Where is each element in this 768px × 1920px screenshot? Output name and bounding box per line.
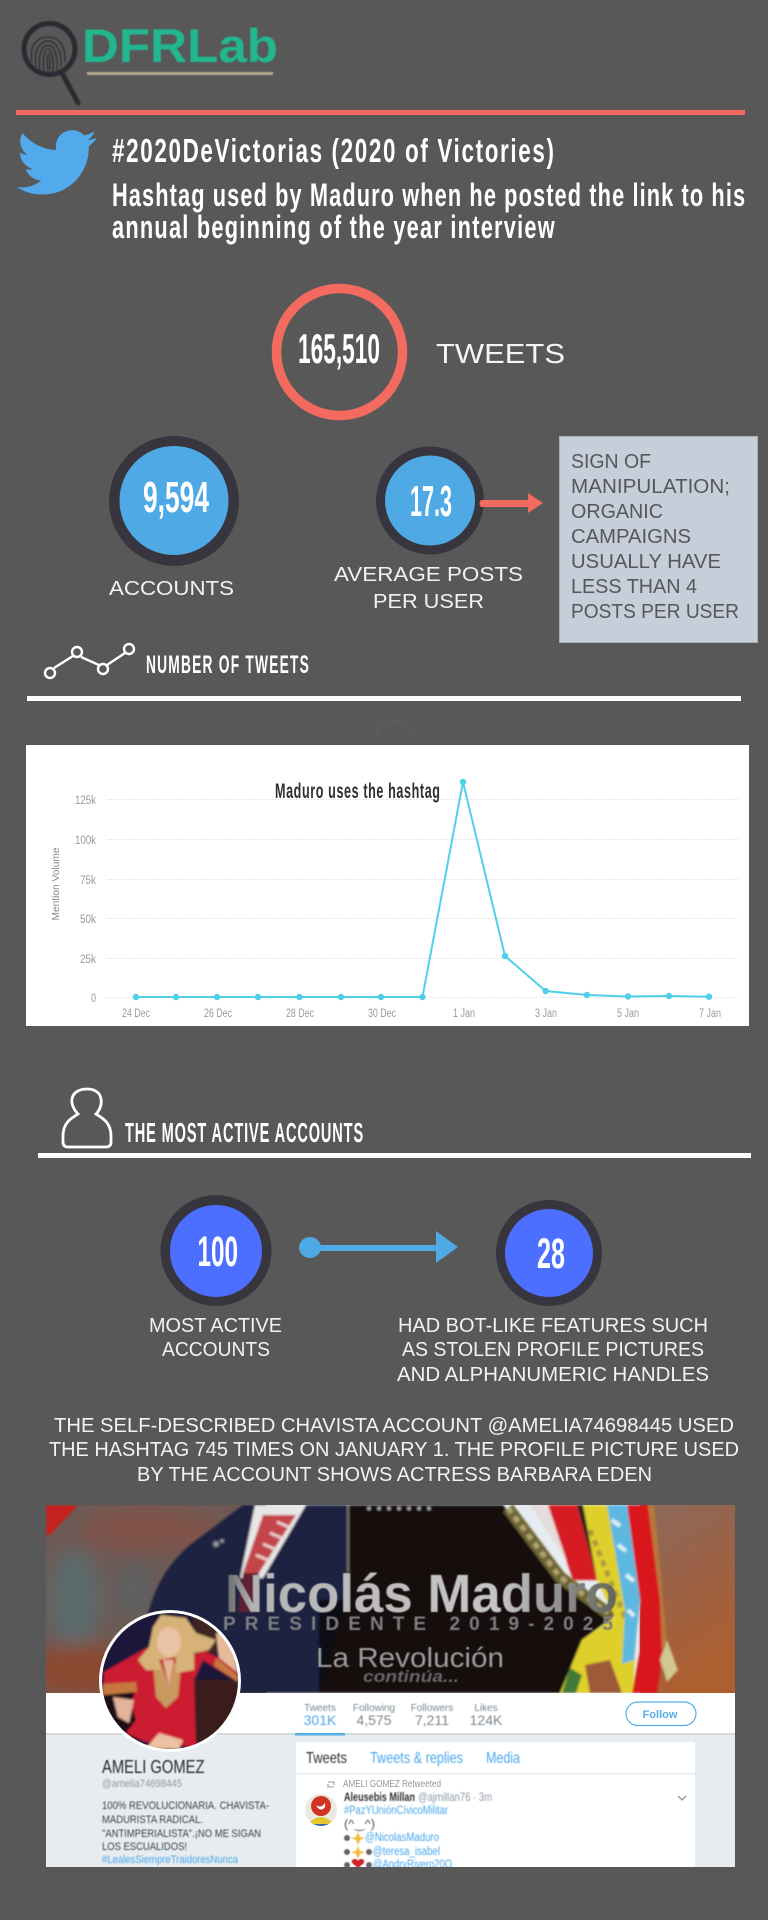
28 number: 28: [537, 1230, 565, 1278]
tweet tabs: [306, 1750, 520, 1767]
tweet body: (^‿^): [344, 1819, 375, 1831]
rule under most active accounts: [38, 1153, 751, 1158]
100 number: 100: [198, 1228, 238, 1276]
average posts label: AVERAGE POSTS: [334, 564, 523, 586]
banner image: [25, 1505, 735, 1696]
tweet body: @teresa_isabel: [373, 1846, 440, 1858]
tweet author: [344, 1790, 492, 1804]
retweet line: [327, 1780, 440, 1788]
tweet author: Aleusebis Millan: [344, 1790, 415, 1804]
profile picture: [99, 1610, 241, 1752]
y axis labels: 100k: [75, 835, 96, 847]
tweet body: #PazYUniónCívicoMilitar: [344, 1805, 448, 1817]
callout: sign of manipulation: ORGANIC: [571, 501, 663, 523]
follow button: Follow: [643, 1709, 678, 1721]
stat: 100 most active accounts: [149, 1195, 282, 1361]
icon: twitter bird: [17, 130, 97, 194]
stat columns: Following: [353, 1703, 395, 1714]
callout: sign of manipulation: [560, 436, 758, 642]
callout: sign of manipulation: SIGN OF: [571, 451, 651, 473]
follow button: [626, 1702, 696, 1726]
callout: sign of manipulation: LESS THAN 4: [571, 576, 697, 598]
line chart panel: mention volume: [26, 745, 749, 1026]
face: [157, 1627, 181, 1657]
profile bio: [102, 1800, 269, 1866]
tweets number: 165,510: [298, 325, 380, 372]
100 circle: [160, 1195, 272, 1306]
y axis title: Mention Volume: [50, 847, 62, 920]
x axis labels: 30 Dec: [368, 1008, 396, 1020]
logo underline: [87, 72, 273, 75]
tweets panel: [296, 1742, 695, 1871]
stat columns: Tweets: [304, 1703, 336, 1714]
red dress: [103, 1648, 238, 1747]
y axis labels: 50k: [80, 914, 96, 926]
stat: average posts per user: 17.3: [410, 477, 452, 526]
logo wordmark: DFRLab: [82, 19, 278, 72]
banner slogan: La Revolución: [316, 1642, 504, 1673]
chart annotation: Maduro uses the hashtag: [275, 779, 440, 803]
chevron: [678, 1796, 686, 1800]
small avatar: [305, 1794, 337, 1826]
profile page background: [46, 1505, 735, 1867]
stat columns: 7,211: [415, 1712, 449, 1728]
stat columns: Likes: [474, 1703, 498, 1714]
28 label: HAD BOT-LIKE FEATURES SUCH: [398, 1315, 708, 1337]
average posts label: PER USER: [373, 591, 484, 613]
tweet tabs: Tweets & replies: [370, 1750, 463, 1767]
tweet body: [344, 1805, 452, 1871]
stat columns: 124K: [470, 1712, 503, 1728]
100 label: [149, 1315, 282, 1361]
data points: [133, 779, 712, 1000]
profile bio: #LealesSiempreTraidoresNunca: [102, 1854, 239, 1866]
heading: hashtag: #2020DeVictorias (2020 of Victories): [112, 132, 554, 169]
y axis labels: 75k: [80, 875, 96, 887]
chair: [194, 1680, 238, 1745]
icon: line chart: [45, 644, 134, 678]
rule under number of tweets: [27, 696, 741, 701]
tweets label: TWEETS: [436, 338, 565, 369]
hand and leg: [113, 1697, 134, 1723]
tweet author: @ajmillan76 · 3m: [418, 1790, 492, 1804]
collar chain: [508, 1508, 613, 1617]
average posts circle: [376, 446, 484, 554]
28 label: AND ALPHANUMERIC HANDLES: [397, 1364, 709, 1386]
x axis labels: [122, 1008, 721, 1020]
text block: chavista account note: THE HASHTAG 745 TIMES ON JANUARY 1. THE PROFILE PICTURE USED: [49, 1439, 739, 1461]
accounts label: ACCOUNTS: [109, 578, 234, 600]
text block: hashtag description: [112, 177, 745, 245]
profile name: AMELI GOMEZ: [102, 1757, 205, 1777]
tweets ring: [276, 288, 402, 416]
arrow: to manipulation note: [480, 493, 543, 513]
x axis labels: 7 Jan: [699, 1008, 721, 1020]
stat columns: 301K: [304, 1712, 337, 1728]
28 label: AS STOLEN PROFILE PICTURES: [402, 1339, 704, 1361]
data line: [136, 782, 709, 997]
heading: the most active accounts: THE MOST ACTIVE ACCOUNTS: [125, 1117, 363, 1148]
icon: magnifying glass with fingerprint: [24, 24, 78, 103]
banner painted backdrop left: [46, 1505, 266, 1693]
stat columns: 4,575: [356, 1712, 392, 1728]
sleeve cuffs: [103, 1682, 137, 1695]
profile sidebar: [102, 1757, 269, 1866]
y axis labels: 125k: [75, 795, 96, 807]
x axis labels: 24 Dec: [122, 1008, 150, 1020]
arrow: 100 to 28: [299, 1231, 458, 1263]
text block: hashtag description: annual beginning of the year interview: [112, 209, 555, 245]
average posts label: [334, 564, 523, 613]
banner subtitle: PRESIDENTE 2019-2025: [223, 1614, 613, 1635]
28 label: [397, 1315, 709, 1386]
text block: chavista account note: THE SELF-DESCRIBED CHAVISTA ACCOUNT @AMELIA74698445 USED: [54, 1415, 734, 1437]
neckline: [153, 1663, 181, 1708]
blonde hair: [138, 1615, 216, 1673]
tweet tabs: Tweets: [306, 1750, 347, 1767]
banner title: Nicolás Maduro: [225, 1564, 618, 1624]
stat: 28 bot-like accounts: [397, 1200, 709, 1386]
text block: hashtag description: Hashtag used by Maduro when he posted the link to his: [112, 177, 745, 213]
text block: chavista account note: BY THE ACCOUNT SHOWS ACTRESS BARBARA EDEN: [137, 1464, 652, 1486]
accounts circle: [109, 436, 239, 566]
screenshot: twitter profile: [25, 1505, 735, 1871]
x axis labels: 3 Jan: [535, 1008, 557, 1020]
stat columns: Followers: [411, 1703, 453, 1714]
banner suit and sash: [120, 1505, 678, 1693]
raised arm: [216, 1633, 238, 1673]
profile nav strip: [46, 1693, 735, 1736]
callout: sign of manipulation: MANIPULATION;: [571, 476, 730, 498]
stat: average posts per user: [334, 446, 523, 613]
accounts number: 9,594: [143, 473, 209, 522]
100 label: MOST ACTIVE: [149, 1315, 282, 1337]
y axis labels: [75, 795, 96, 1005]
profile handle: @amelia74698445: [102, 1778, 182, 1790]
tweet body: @AndryRivero20O: [373, 1859, 452, 1871]
stat columns: [304, 1703, 503, 1728]
profile bio: "ANTIMPERIALISTA".¡NO ME SIGAN: [102, 1828, 261, 1840]
callout: sign of manipulation: CAMPAIGNS: [571, 526, 691, 548]
profile bio: LOS ESCUALIDOS!: [102, 1841, 187, 1853]
profile bio: MADURISTA RADICAL.: [102, 1814, 203, 1826]
stat: tweets: [276, 288, 565, 416]
red divider: [16, 110, 745, 115]
y axis labels: 0: [91, 993, 96, 1005]
x axis labels: 28 Dec: [286, 1008, 314, 1020]
tweet tabs: Media: [486, 1750, 520, 1767]
banner painted backdrop right: [640, 1505, 735, 1693]
callout: sign of manipulation: POSTS PER USER: [571, 601, 739, 623]
heading: number of tweets: NUMBER OF TWEETS: [146, 652, 309, 679]
100 label: ACCOUNTS: [162, 1339, 270, 1361]
y axis labels: 25k: [80, 954, 96, 966]
callout: sign of manipulation: USUALLY HAVE: [571, 551, 721, 573]
banner slogan second line: continúa...: [363, 1667, 459, 1686]
28 circle: [496, 1200, 602, 1306]
x axis labels: 1 Jan: [453, 1008, 475, 1020]
text block: chavista account note: [49, 1415, 739, 1486]
icon: person: [63, 1089, 111, 1147]
stat: accounts: [109, 436, 239, 600]
tweet body: @NicolasMaduro: [365, 1832, 439, 1844]
x axis labels: 5 Jan: [617, 1008, 639, 1020]
x axis labels: 26 Dec: [204, 1008, 232, 1020]
retweet line: AMELI GOMEZ Retweeted: [343, 1779, 441, 1790]
logo: DFRLab: [24, 19, 278, 103]
profile bio: 100% REVOLUCIONARIA. CHAVISTA-: [102, 1800, 269, 1812]
